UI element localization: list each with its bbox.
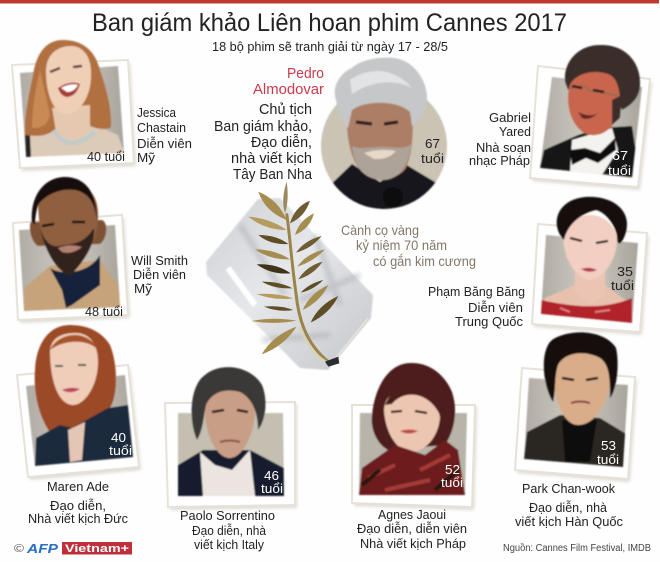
age: 48 tuổi — [85, 304, 123, 319]
age — [421, 136, 444, 166]
name and role — [28, 479, 128, 526]
logo: AFP Vietnam+: AFP — [26, 541, 58, 556]
name and role — [137, 105, 192, 165]
name and role: Paolo Sorrentino — [180, 508, 275, 523]
card: Park Chan-wook — [515, 332, 637, 529]
name and role — [180, 508, 275, 552]
name and role: Nhà viết kịch Pháp — [360, 536, 466, 551]
card: Gabriel Yared — [469, 45, 652, 190]
age — [109, 430, 132, 458]
name and role: Nhà soạn — [476, 140, 531, 155]
age: tuổi — [421, 151, 444, 166]
name and role: viết kịch Hàn Quốc — [515, 514, 623, 529]
age: 67 — [612, 148, 628, 163]
card: Maren Ade — [17, 325, 141, 526]
card: Jessica Chastain — [12, 40, 192, 171]
age: tuổi — [597, 452, 619, 467]
age: tuổi — [109, 443, 132, 458]
role: Đạo diễn, — [251, 134, 312, 151]
logo: AFP Vietnam+ — [14, 541, 132, 556]
age: tuổi — [441, 475, 463, 490]
card: Agnes Jaoui — [352, 363, 477, 551]
photo frame — [352, 405, 477, 510]
name and role: Diễn viên — [133, 267, 186, 282]
name and role: Đạo diễn, — [50, 498, 106, 513]
logo: AFP Vietnam+: © — [14, 543, 24, 555]
name and role: Diễn viên — [468, 300, 523, 315]
name and role — [469, 110, 531, 168]
photo frame — [515, 368, 637, 482]
name and role: viết kịch Italy — [194, 537, 264, 552]
name and role: Đạo diễn, nhà — [529, 500, 608, 515]
portrait — [20, 40, 125, 157]
name and role: Nhà viết kịch Đức — [28, 511, 128, 526]
name and role: Jessica — [137, 105, 177, 120]
age — [608, 148, 631, 178]
caption: palm: kỷ niệm 70 năm — [356, 237, 447, 253]
role: Tây Ban Nha — [233, 166, 313, 183]
photo frame — [13, 215, 130, 323]
name — [253, 66, 324, 98]
name: Pedro — [287, 66, 324, 82]
caption: palm: Cành cọ vàng — [341, 222, 419, 238]
portrait — [359, 363, 467, 495]
portrait — [26, 325, 135, 466]
age: 67 — [425, 136, 440, 151]
golden palm on crystal — [206, 182, 373, 370]
portrait — [541, 197, 638, 323]
name and role: Mỹ — [137, 150, 156, 165]
portrait — [178, 367, 284, 496]
age — [611, 264, 634, 293]
age: 53 — [601, 438, 616, 453]
card: Pedro Almodovar — [214, 58, 447, 215]
name and role: nhạc Pháp — [469, 153, 530, 168]
name and role — [515, 481, 623, 529]
age: tuổi — [261, 481, 283, 496]
role — [214, 101, 313, 183]
age: 40 — [111, 430, 126, 445]
name and role: Gabriel — [489, 110, 531, 125]
name and role: Agnes Jaoui — [378, 507, 446, 522]
name: Almodovar — [253, 82, 324, 98]
role: Chủ tịch — [259, 101, 312, 118]
age — [597, 438, 619, 467]
age: tuổi — [611, 278, 634, 293]
photo frame — [17, 365, 141, 480]
title: Ban giám khảo Liên hoan phim Cannes 2017 — [92, 9, 567, 37]
crystal — [206, 198, 373, 370]
name and role: Park Chan-wook — [522, 481, 615, 496]
name and role — [428, 284, 525, 329]
caption: palm — [341, 222, 476, 269]
age: 40 tuổi — [87, 149, 125, 164]
photo frame — [530, 66, 652, 190]
age — [441, 462, 463, 490]
card: Paolo Sorrentino — [165, 367, 297, 552]
portrait — [19, 177, 120, 311]
age: 46 — [264, 468, 279, 483]
portrait circle — [321, 58, 447, 215]
portrait — [540, 45, 642, 178]
name and role: Yared — [499, 124, 531, 139]
name and role: Mỹ — [134, 281, 153, 296]
photo frame — [165, 402, 297, 510]
name and role — [357, 507, 467, 551]
source note: Nguồn: Cannes Film Festival, IMDB — [503, 542, 651, 554]
name and role: Maren Ade — [47, 479, 109, 494]
age: tuổi — [608, 163, 631, 178]
age — [261, 468, 283, 496]
age: 52 — [445, 462, 460, 477]
name and role — [131, 253, 188, 296]
name and role: Diễn viên — [137, 136, 192, 151]
name and role: Will Smith — [131, 253, 188, 268]
name and role: Phạm Băng Băng — [428, 284, 525, 299]
photo frame — [532, 224, 649, 335]
palm branch — [248, 182, 339, 367]
name and role: Chastain — [137, 120, 186, 135]
name and role: Trung Quốc — [455, 314, 523, 329]
name and role: Đạo diễn, diễn viên — [357, 521, 467, 536]
age: 35 — [617, 264, 633, 279]
card: Will Smith — [13, 177, 188, 323]
top red bar — [0, 0, 659, 4]
caption: palm: có gắn kim cương — [373, 253, 476, 269]
logo: AFP Vietnam+: Vietnam+ — [65, 543, 129, 555]
name and role: Đạo diễn, nhà — [192, 523, 267, 538]
portrait — [524, 332, 628, 468]
photo frame — [12, 60, 136, 171]
role: Ban giám khảo, — [214, 118, 312, 135]
card: Pham Bang Bang — [428, 197, 649, 335]
subtitle: 18 bộ phim sẽ tranh giải từ ngày 17 - 28/5 — [212, 39, 448, 54]
role: nhà viết kịch — [231, 150, 312, 167]
